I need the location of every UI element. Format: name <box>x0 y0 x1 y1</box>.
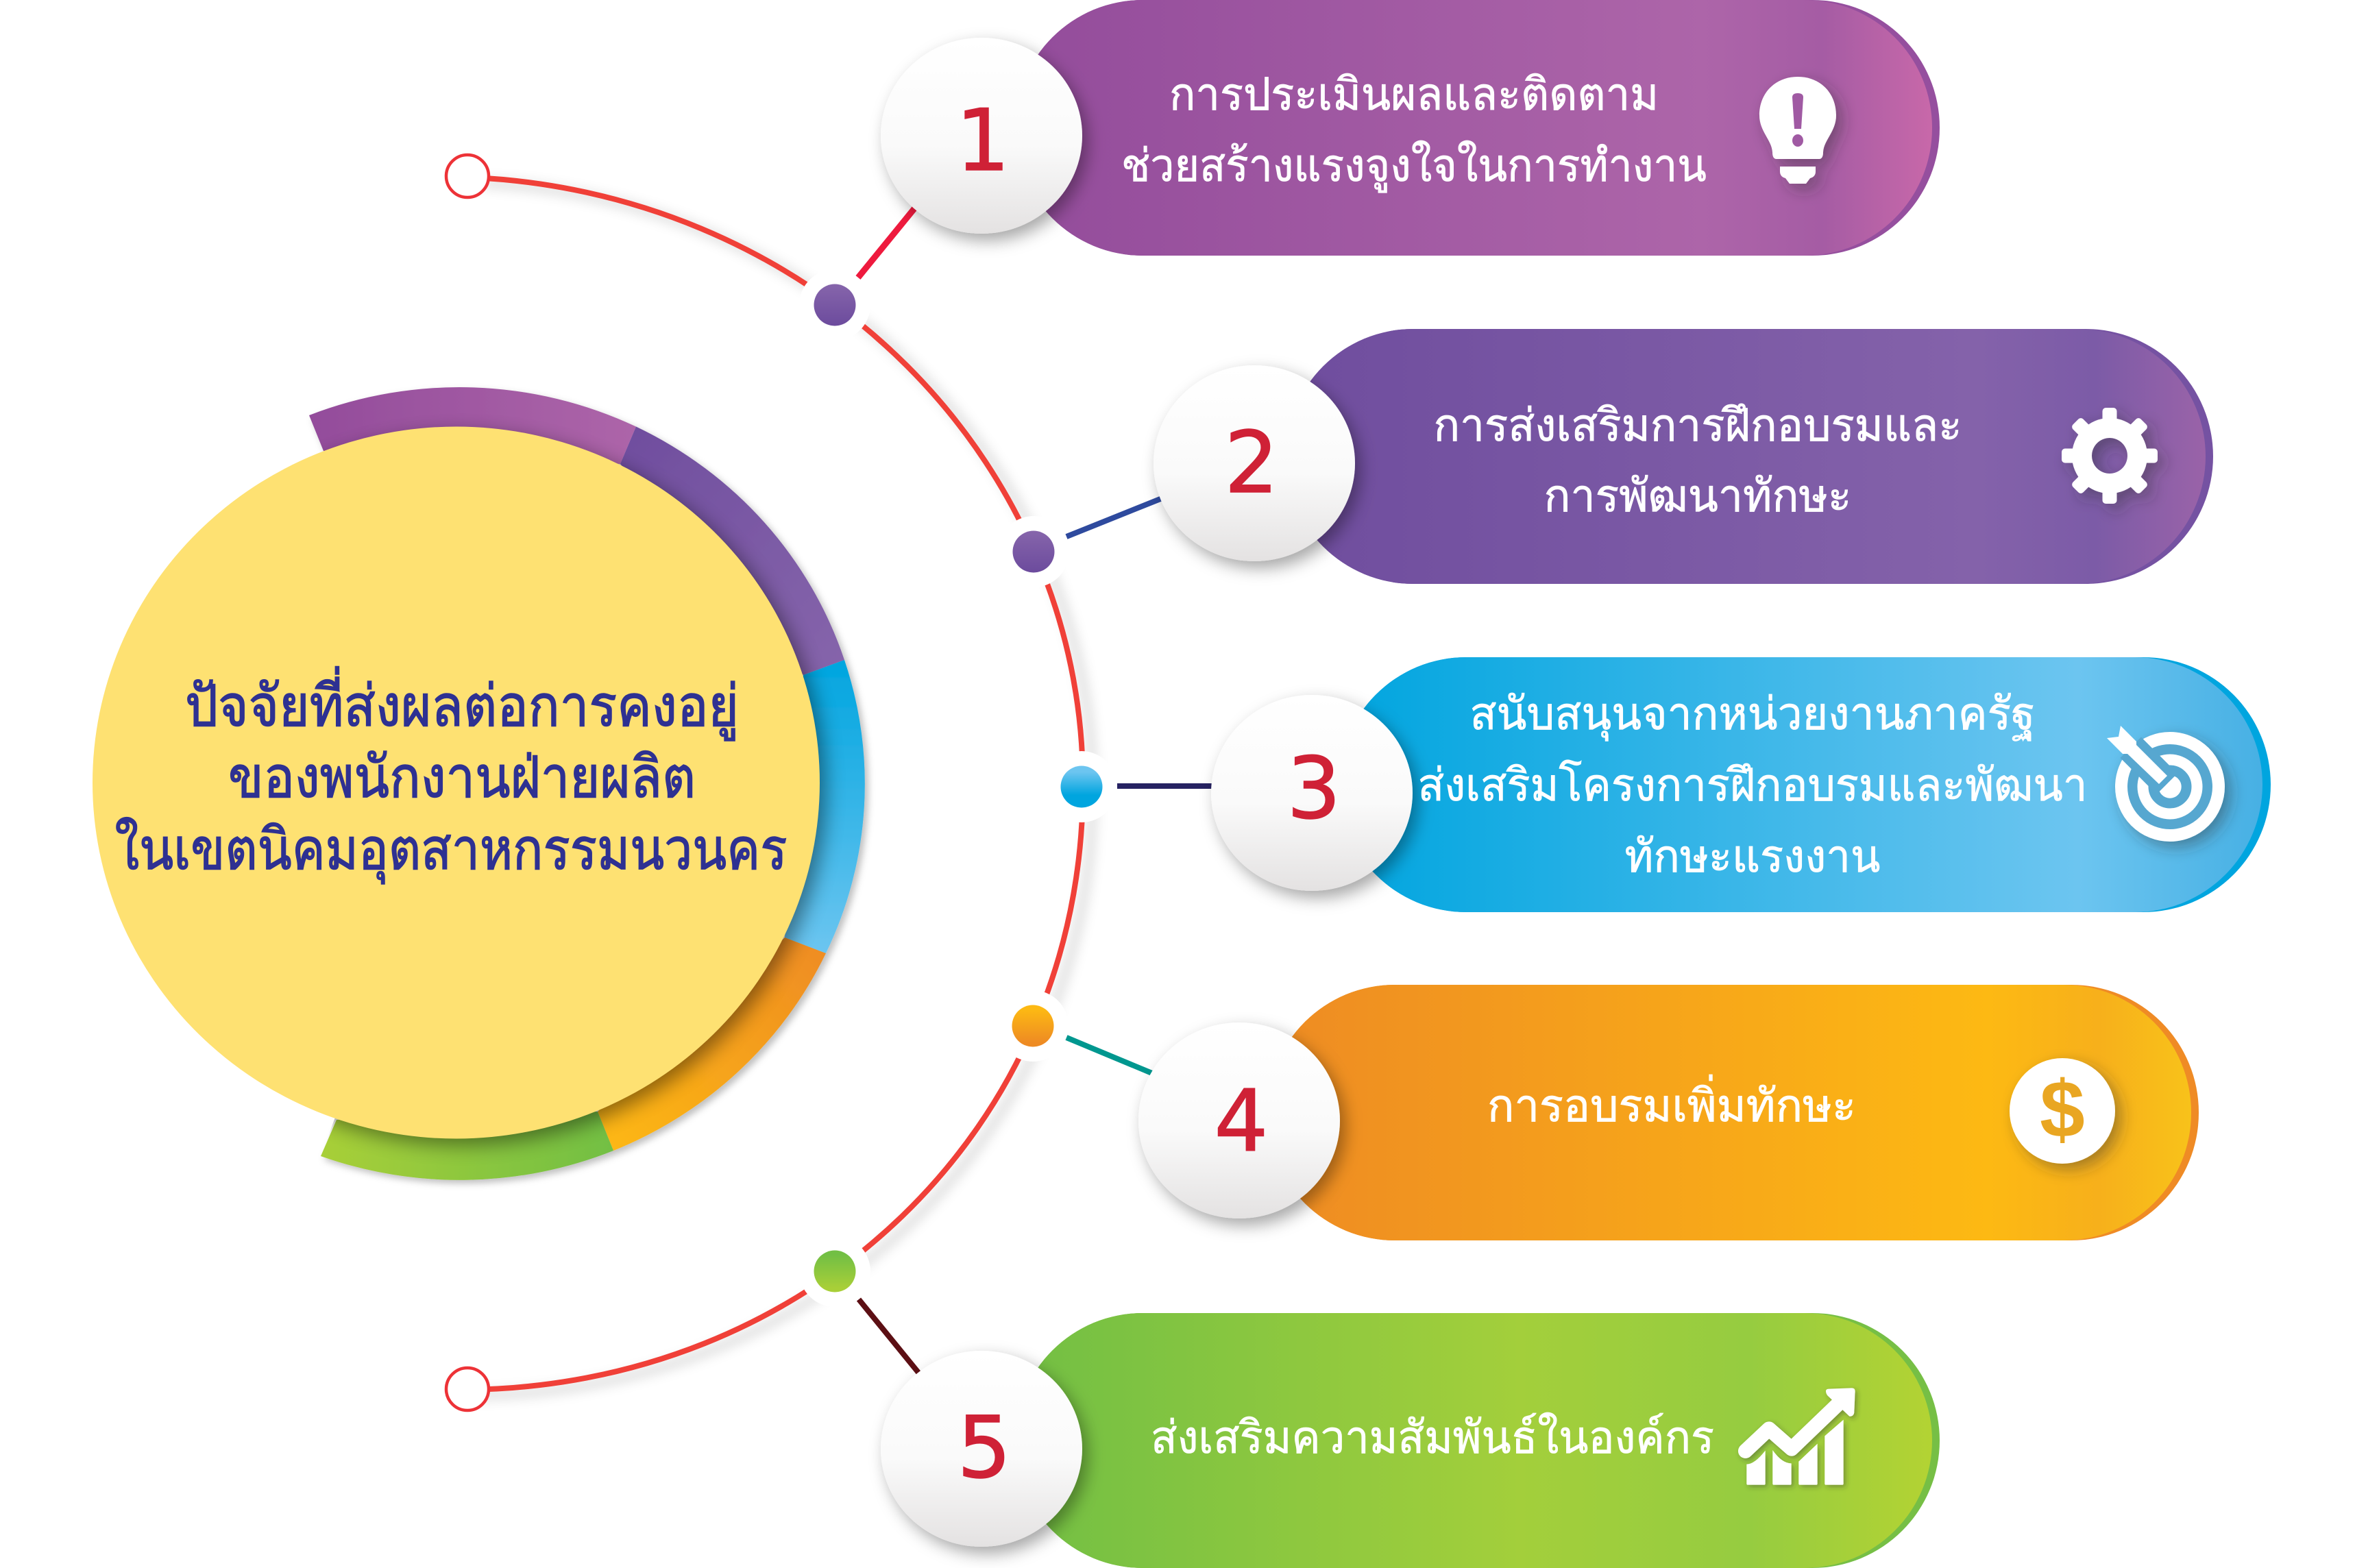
pill 4 <box>1267 985 2199 1240</box>
number badge 3 <box>1211 695 1413 891</box>
icon: gear <box>2062 408 2158 504</box>
text 1: ช่วยสร้างแรงจูงใจในการทำงาน <box>1121 140 1707 193</box>
pill 3 <box>1339 657 2271 912</box>
connector line 2 <box>1066 498 1164 537</box>
central title: ปัจจัยที่ส่งผลต่อการคงอยู่ <box>185 666 739 741</box>
number 2: 2 <box>1225 414 1278 513</box>
pill 2 <box>1286 329 2213 584</box>
connector dot 5 <box>799 1236 870 1307</box>
text 3 <box>1417 688 2088 881</box>
connector line 3 <box>1117 783 1217 789</box>
connector line 1 <box>858 204 918 278</box>
curved red arc <box>459 177 1083 1390</box>
ring segment: orange <box>598 938 826 1151</box>
panel: item 5 <box>881 1313 1940 1568</box>
text 1 <box>1121 69 1707 193</box>
shadow of yellow circle on ring <box>324 422 839 1157</box>
number 4: 4 <box>1215 1073 1268 1171</box>
connector dot 2 <box>998 516 1069 587</box>
connector dot 3 <box>1046 751 1117 822</box>
text 2 <box>1434 400 1962 521</box>
icon: growth chart <box>1746 1388 1855 1485</box>
number badge 2 <box>1154 365 1355 561</box>
central yellow circle <box>93 426 820 1139</box>
ring segment: blue <box>785 660 865 953</box>
arc end marker: top <box>446 155 489 197</box>
number badge 5 <box>881 1351 1082 1547</box>
panel: item 1 <box>881 0 1940 256</box>
text 3: ทักษะแรงงาน <box>1624 831 1881 881</box>
text 3: สนับสนุนจากหน่วยงานภาครัฐ <box>1469 688 2036 742</box>
ring segment: violet <box>620 426 844 675</box>
icon: dollar coin <box>2010 1058 2115 1164</box>
central title: ในเขตนิคมอุตสาหกรรมนวนคร <box>115 817 787 885</box>
text 4: การอบรมเพิ่มทักษะ <box>1487 1075 1856 1131</box>
number 3: 3 <box>1287 739 1341 838</box>
ring segment: purple <box>309 387 636 464</box>
central title <box>115 666 787 885</box>
text 1: การประเมินผลและติดตาม <box>1169 69 1659 119</box>
ring segment: green <box>321 1112 613 1180</box>
text 2: การพัฒนาทักษะ <box>1543 470 1852 521</box>
icon: light bulb <box>1759 77 1836 184</box>
panel: item 2 <box>1154 329 2213 584</box>
connector line 4 <box>1066 1038 1157 1075</box>
text 2: การส่งเสริมการฝึกอบรมและ <box>1434 400 1962 450</box>
panel: item 4 <box>1138 985 2199 1240</box>
pill 5 <box>1015 1313 1940 1568</box>
connector dot 4 <box>997 990 1069 1062</box>
text 5: ส่งเสริมความสัมพันธ์ในองค์กร <box>1151 1412 1714 1462</box>
icon: target <box>2107 726 2225 842</box>
number badge 4 <box>1138 1022 1340 1218</box>
central title: ของพนักงานฝ่ายผลิต <box>228 745 696 809</box>
text 3: ส่งเสริมโครงการฝึกอบรมและพัฒนา <box>1417 759 2088 810</box>
connector dot 1 <box>799 269 870 341</box>
number 1: 1 <box>956 92 1010 191</box>
icon: dollar coin: $ <box>2040 1064 2085 1155</box>
panel: item 3 <box>1211 657 2271 912</box>
central ring <box>309 387 865 1180</box>
pill 1 <box>1015 0 1940 256</box>
connector line 5 <box>859 1299 922 1377</box>
arc end marker: bottom <box>446 1368 489 1410</box>
number 5: 5 <box>957 1399 1011 1497</box>
number badge 1 <box>881 38 1082 234</box>
